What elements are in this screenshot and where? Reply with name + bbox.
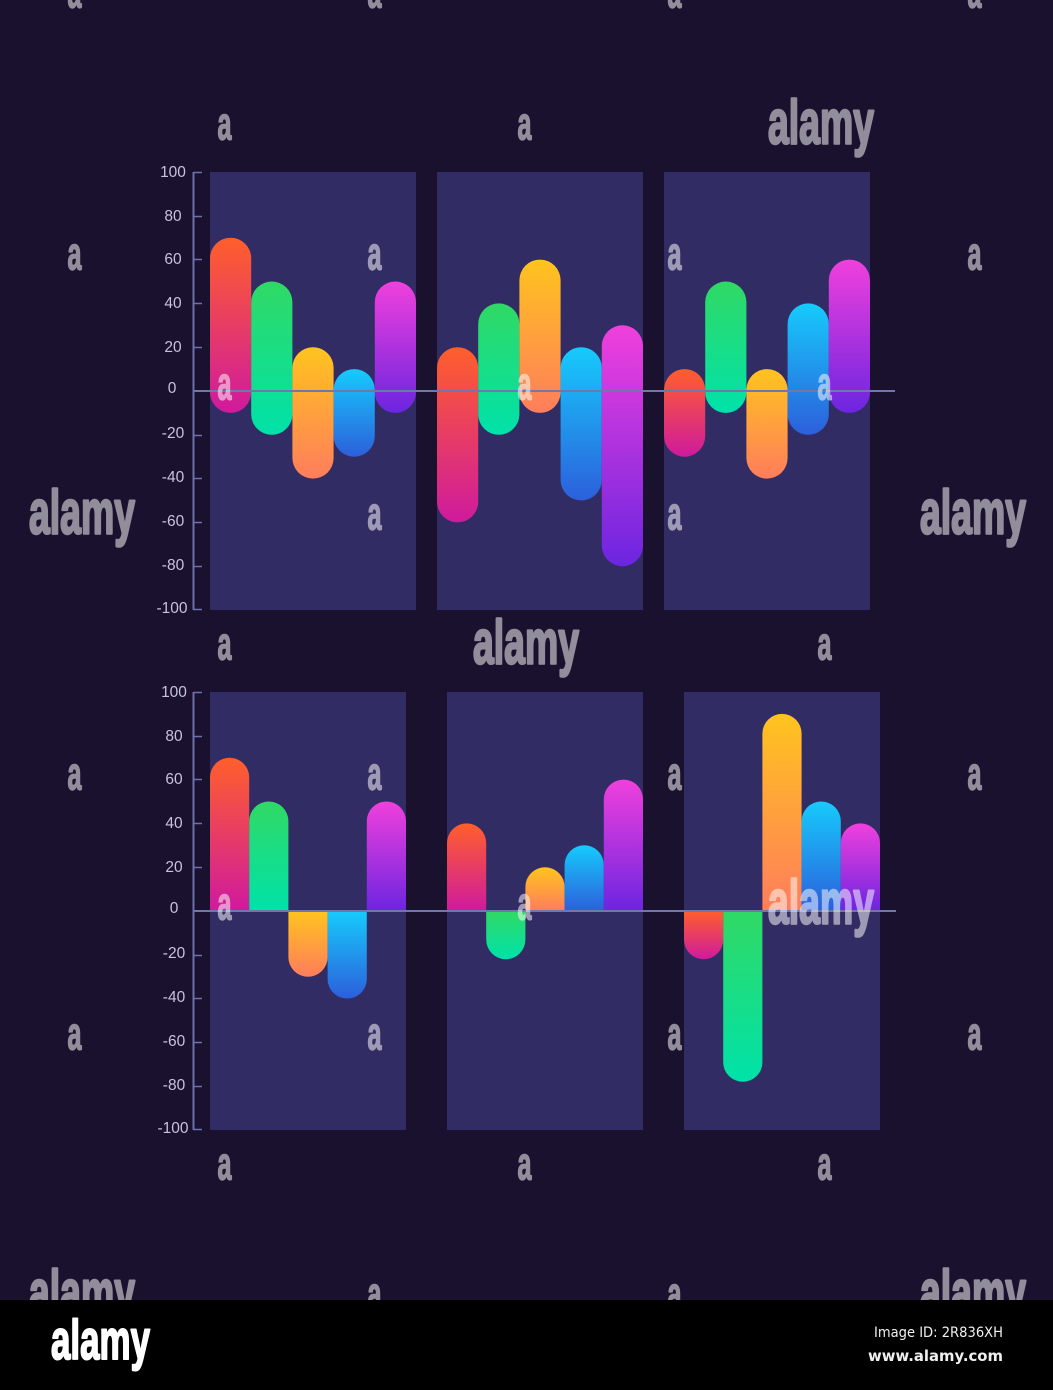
watermarks: a (518, 1138, 532, 1190)
bottom chart: y axis labels: 0 (170, 900, 179, 917)
watermarks: a (368, 488, 382, 540)
bottom chart: y axis with ticks (194, 692, 202, 1130)
watermarks: a (818, 618, 832, 670)
watermarks: a (68, 1008, 82, 1060)
top chart: y axis labels: 100 (160, 164, 186, 181)
top panel 2 (437, 172, 643, 610)
watermarks: a (68, 228, 82, 280)
top panel 3 (664, 172, 870, 610)
watermarks: a (968, 748, 982, 800)
bottom panel 2 (447, 692, 643, 1130)
bottom chart: y axis labels: -20 (163, 945, 186, 962)
bottom chart: y axis labels: 100 (161, 684, 187, 701)
top chart: y axis labels: -60 (162, 513, 185, 530)
bottom chart (157, 684, 896, 1137)
watermarks: a (518, 358, 532, 410)
watermarks: a (668, 1008, 682, 1060)
bottom chart: y axis labels: 40 (165, 815, 183, 832)
watermarks: a (668, 488, 682, 540)
watermarks: a (218, 358, 232, 410)
bottom chart: y axis labels: 80 (165, 728, 183, 745)
watermarks: a (968, 228, 982, 280)
top chart: y axis labels: 40 (164, 295, 182, 312)
watermarks: a (218, 98, 232, 150)
top chart: y axis labels (156, 164, 188, 617)
watermarks: alamy (473, 608, 579, 678)
top chart: zero baseline (194, 390, 895, 392)
top chart: y axis labels: 20 (164, 339, 182, 356)
bottom chart: y axis labels: 60 (165, 771, 183, 788)
watermarks: a (818, 1138, 832, 1190)
top chart: y axis with ticks (194, 172, 202, 610)
top chart: y axis labels: -40 (162, 469, 185, 486)
watermarks: a (668, 748, 682, 800)
top chart (156, 164, 895, 617)
bottom chart: y axis labels: -100 (157, 1120, 189, 1137)
top chart: y axis labels: 80 (164, 208, 182, 225)
bottom chart: zero baseline (194, 910, 896, 912)
watermarks: a (518, 878, 532, 930)
footer url: www.alamy.com (868, 1347, 1003, 1365)
watermarks: alamy (29, 1258, 135, 1328)
watermarks: a (218, 878, 232, 930)
bottom panel 3 (684, 692, 880, 1130)
watermarks: a (518, 98, 532, 150)
watermarks: a (668, 228, 682, 280)
bottom chart: y axis labels: -40 (163, 989, 186, 1006)
footer bar (0, 1300, 1053, 1390)
watermarks: a (368, 228, 382, 280)
top chart: y axis labels: 60 (164, 251, 182, 268)
bottom chart: y axis labels: -80 (163, 1077, 186, 1094)
watermarks: a (68, 748, 82, 800)
bottom chart: y axis labels (157, 684, 189, 1137)
bottom panel 1 (210, 692, 406, 1130)
watermarks: a (368, 1268, 382, 1320)
watermarks: alamy (768, 868, 874, 938)
bottom chart: y axis labels: -60 (163, 1033, 186, 1050)
top panel 1 (210, 172, 416, 610)
bottom chart: y axis labels: 20 (165, 859, 183, 876)
watermarks: alamy (29, 478, 135, 548)
watermarks: a (218, 1138, 232, 1190)
watermarks: a (668, 1268, 682, 1320)
footer logo: alamy (51, 1308, 150, 1371)
footer image id: Image ID: 2R836XH (874, 1325, 1003, 1341)
watermarks: a (218, 618, 232, 670)
watermarks: a (368, 748, 382, 800)
watermarks: a (968, 1008, 982, 1060)
watermarks: a (818, 358, 832, 410)
top chart: y axis labels: 0 (168, 380, 177, 397)
top chart: y axis labels: -100 (156, 600, 188, 617)
top chart: y axis labels: -20 (162, 425, 185, 442)
watermarks: a (368, 1008, 382, 1060)
top chart: y axis labels: -80 (162, 557, 185, 574)
watermarks: alamy (768, 88, 874, 158)
